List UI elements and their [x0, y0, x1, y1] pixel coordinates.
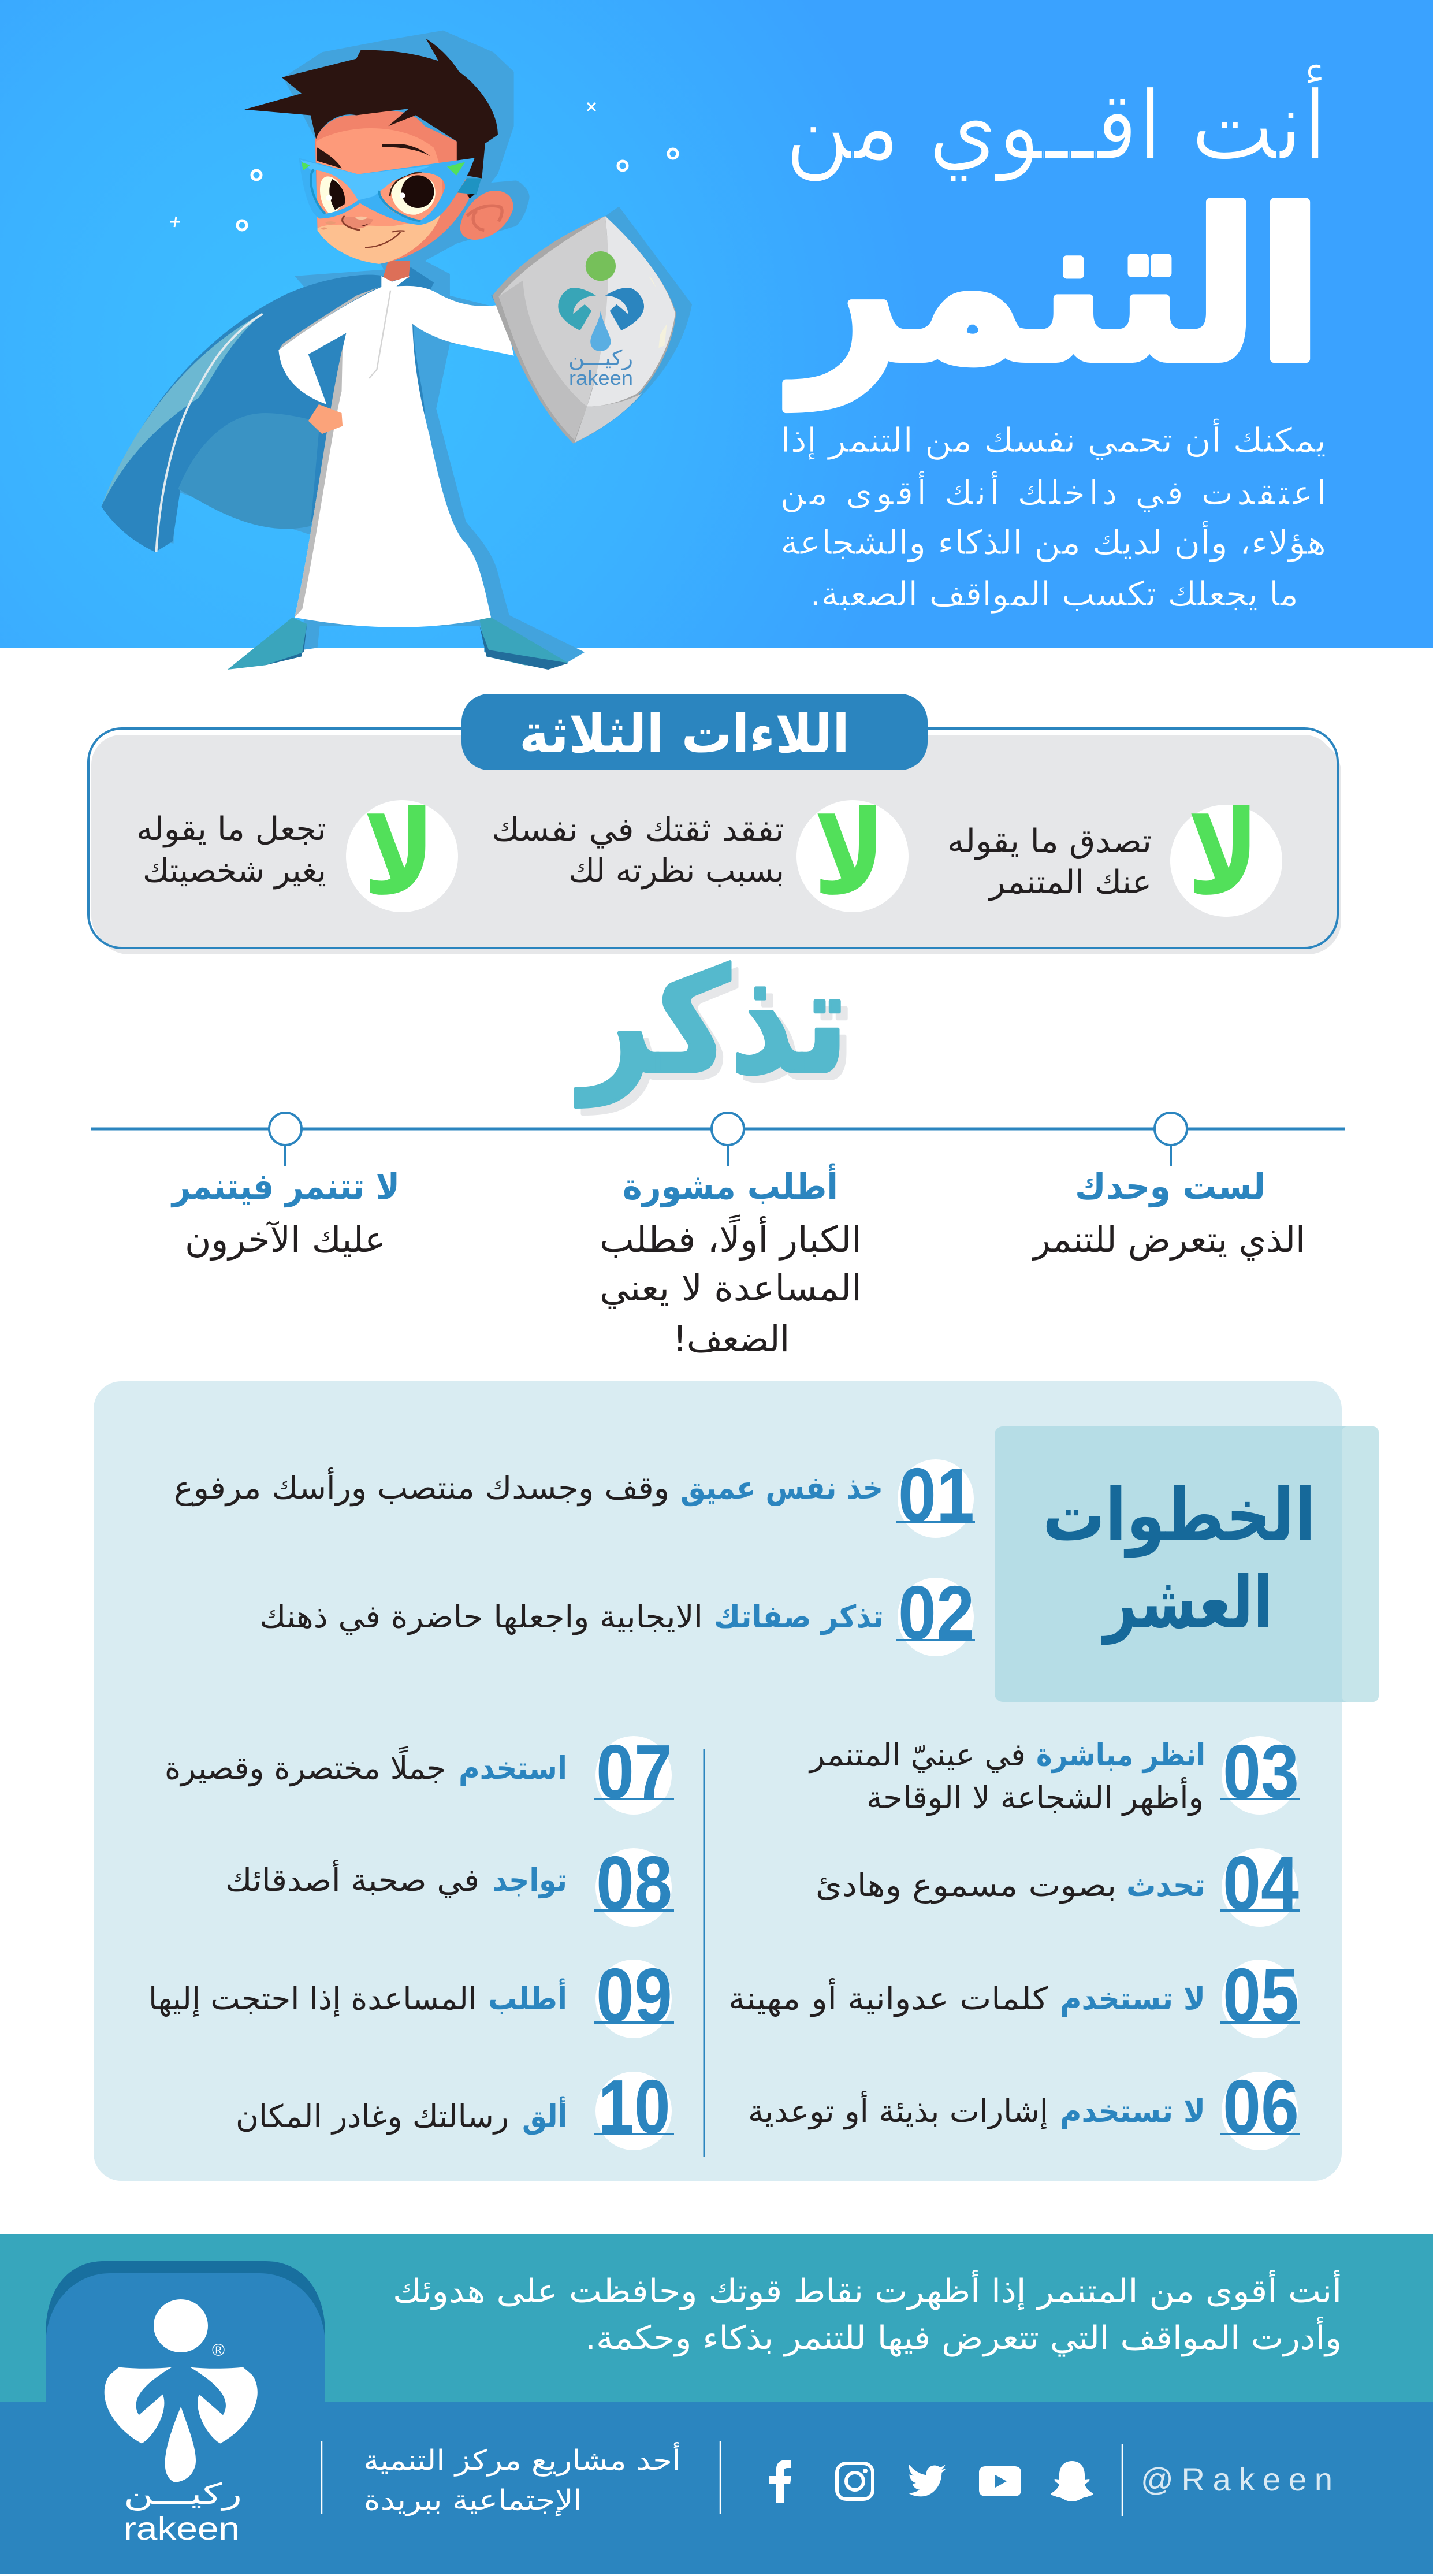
steps heading box: العشر	[1101, 1561, 1273, 1645]
item: third no: تجعل ما يقوله	[136, 811, 326, 848]
footer	[0, 2234, 1433, 2574]
hero panel	[0, 0, 1433, 670]
item: third no	[136, 786, 458, 921]
project description	[363, 2442, 681, 2516]
step 03	[808, 1729, 1300, 1816]
footer message	[393, 2270, 1342, 2357]
character shadow silhouette	[160, 31, 585, 663]
step 08	[225, 1841, 674, 1927]
column: you are not alone: الذي يتعرض للتنمر	[1032, 1218, 1305, 1261]
item: first no: تصدق ما يقوله	[947, 823, 1152, 860]
logo wordmark: rakeen	[124, 2510, 240, 2547]
shield logo text	[568, 347, 633, 389]
step 05: 05	[1223, 1953, 1299, 2038]
column: ask advice: الضعف!	[673, 1318, 790, 1360]
icon: instagram	[837, 2463, 873, 2499]
footer dividers	[322, 2441, 1122, 2516]
item: second no	[492, 786, 909, 921]
step 10: ألق	[522, 2096, 567, 2135]
cape	[102, 267, 434, 552]
column: ask advice	[600, 1163, 862, 1360]
eyes	[320, 176, 343, 214]
icon: twitter	[908, 2465, 946, 2496]
step 08: في صحبة أصدقائك	[225, 1860, 479, 1898]
divider	[704, 1749, 705, 2157]
hair	[244, 38, 498, 179]
column: do not bully	[170, 1165, 400, 1261]
shield logo text: rakeen	[569, 367, 633, 389]
shield logo text: ركيـــن	[568, 347, 633, 370]
step 08: تواجد	[493, 1862, 567, 1898]
step 09	[148, 1953, 674, 2038]
project description: الإجتماعية ببريدة	[364, 2484, 582, 2516]
logo tab	[46, 2261, 325, 2574]
step 02: الايجابية واجعلها حاضرة في ذهنك	[259, 1599, 703, 1635]
title main word: التنمر	[785, 168, 1322, 410]
face	[315, 111, 471, 264]
item: second no: تفقد ثقتك في نفسك	[492, 811, 784, 849]
step 01: 01	[898, 1452, 974, 1537]
step 03: وأظهر الشجاعة لا الوقاحة	[866, 1777, 1204, 1816]
step 09: 09	[596, 1953, 672, 2038]
column: you are not alone: لست وحدك	[1075, 1165, 1265, 1207]
step 07: 07	[596, 1729, 672, 1814]
footer blue band	[0, 2402, 1433, 2574]
footer teal band	[0, 2234, 1433, 2402]
step 02	[259, 1570, 975, 1656]
column: ask advice: الكبار أولًا، فطلب	[600, 1214, 862, 1261]
column: ask advice: أطلب مشورة	[623, 1163, 838, 1207]
nose and mouth	[342, 217, 373, 229]
logo wordmark	[124, 2477, 242, 2547]
registered mark: ®	[212, 2341, 225, 2360]
boots	[228, 618, 307, 670]
step 02: تذكر صفاتك	[714, 1599, 884, 1635]
step 05	[728, 1953, 1300, 2038]
icon: youtube	[979, 2466, 1021, 2496]
footer message: أنت أقوى من المتنمر إذا أظهرت نقاط قوتك وحافظت على هدوئك	[393, 2270, 1342, 2311]
item: second no: لا	[813, 786, 886, 921]
step 06: إشارات بذيئة أو توعدية	[748, 2091, 1048, 2129]
neck	[381, 261, 410, 282]
heading pill: اللاءات الثلاثة	[519, 703, 850, 765]
shield	[492, 216, 676, 444]
character: boy hero with cape and shield	[102, 31, 692, 670]
column: do not bully: لا تتنمر فيتنمر	[170, 1165, 400, 1207]
step 01: وقف وجسدك منتصب ورأسك مرفوع	[174, 1467, 669, 1506]
steps heading box	[995, 1426, 1379, 1702]
shield logo mark	[558, 251, 644, 351]
step 03: 03	[1223, 1729, 1299, 1814]
logo wordmark: ركيـــن	[124, 2477, 242, 2511]
step 01: خذ نفس عميق	[680, 1470, 883, 1506]
step 09: أطلب	[488, 1978, 567, 2017]
column: do not bully: عليك الآخرون	[185, 1218, 386, 1261]
step 02: 02	[898, 1570, 974, 1655]
step 06: لا تستخدم	[1060, 2093, 1205, 2129]
step 07: استخدم	[459, 1750, 567, 1786]
logo mark	[105, 2299, 258, 2482]
step 05: لا تستخدم	[1060, 1980, 1205, 2017]
column: you are not alone	[1032, 1165, 1305, 1261]
heading: remember: تذكر	[582, 945, 855, 1114]
hand	[308, 404, 343, 434]
item: first no	[947, 786, 1282, 921]
step 06	[748, 2064, 1300, 2150]
step 10	[236, 2064, 674, 2150]
item: third no: لا	[363, 786, 436, 921]
timeline	[91, 1113, 1345, 1166]
intro paragraph: اعتقدت في داخلك أنك أقوى من	[780, 471, 1326, 513]
heading pill	[461, 694, 928, 770]
decorative sparkles	[170, 103, 678, 230]
step 05: كلمات عدوانية أو مهينة	[728, 1978, 1048, 2017]
step 08: 08	[596, 1841, 672, 1926]
step 06: 06	[1223, 2064, 1299, 2149]
step 09: المساعدة إذا احتجت إليها	[148, 1980, 477, 2017]
item: first no: لا	[1188, 786, 1259, 921]
robe	[278, 286, 514, 627]
project description: أحد مشاريع مركز التنمية	[363, 2442, 681, 2477]
intro paragraph: يمكنك أن تحمي نفسك من التنمر إذا	[780, 418, 1326, 460]
steps heading box: الخطوات	[1043, 1474, 1316, 1558]
item: second no: بسبب نظرته لك	[568, 852, 784, 890]
step 10: 10	[598, 2064, 670, 2149]
mask	[299, 158, 475, 225]
panel: three noes	[88, 694, 1341, 954]
intro paragraph	[780, 418, 1326, 614]
shield shadow	[491, 206, 692, 444]
footer message: وأدرت المواقف التي تتعرض فيها للتنمر بذكاء وحكمة.	[585, 2317, 1342, 2357]
step 03: انظر مباشرة	[1036, 1737, 1205, 1773]
icon: facebook	[769, 2460, 791, 2503]
eyes, mask, nose, mouth and ear	[299, 144, 530, 247]
panel: ten steps	[94, 1381, 1379, 2181]
step 04: بصوت مسموع وهادئ	[816, 1867, 1116, 1904]
icon: snapchat	[1051, 2461, 1093, 2501]
step 10: رسالتك وغادر المكان	[236, 2098, 509, 2135]
step 01	[174, 1452, 975, 1538]
step 04: تحدث	[1126, 1867, 1205, 1904]
social handle: @Rakeen	[1141, 2461, 1332, 2497]
step 03: في عينيّ المتنمر	[808, 1737, 1026, 1773]
step 04: 04	[1223, 1841, 1299, 1926]
heading: remember: تذكر	[575, 938, 848, 1107]
step 07: جملًا مختصرة وقصيرة	[165, 1746, 446, 1786]
intro paragraph: هؤلاء، وأن لديك من الذكاء والشجاعة	[780, 521, 1326, 563]
column: ask advice: المساعدة لا يعني	[600, 1267, 862, 1309]
step 04	[816, 1841, 1300, 1927]
title line one: أنت اقــوي من	[785, 64, 1327, 182]
step 07	[165, 1729, 674, 1815]
item: third no: يغير شخصيتك	[143, 852, 326, 890]
item: first no: عنك المتنمر	[988, 864, 1152, 901]
intro paragraph: ما يجعلك تكسب المواقف الصعبة.	[810, 574, 1298, 614]
